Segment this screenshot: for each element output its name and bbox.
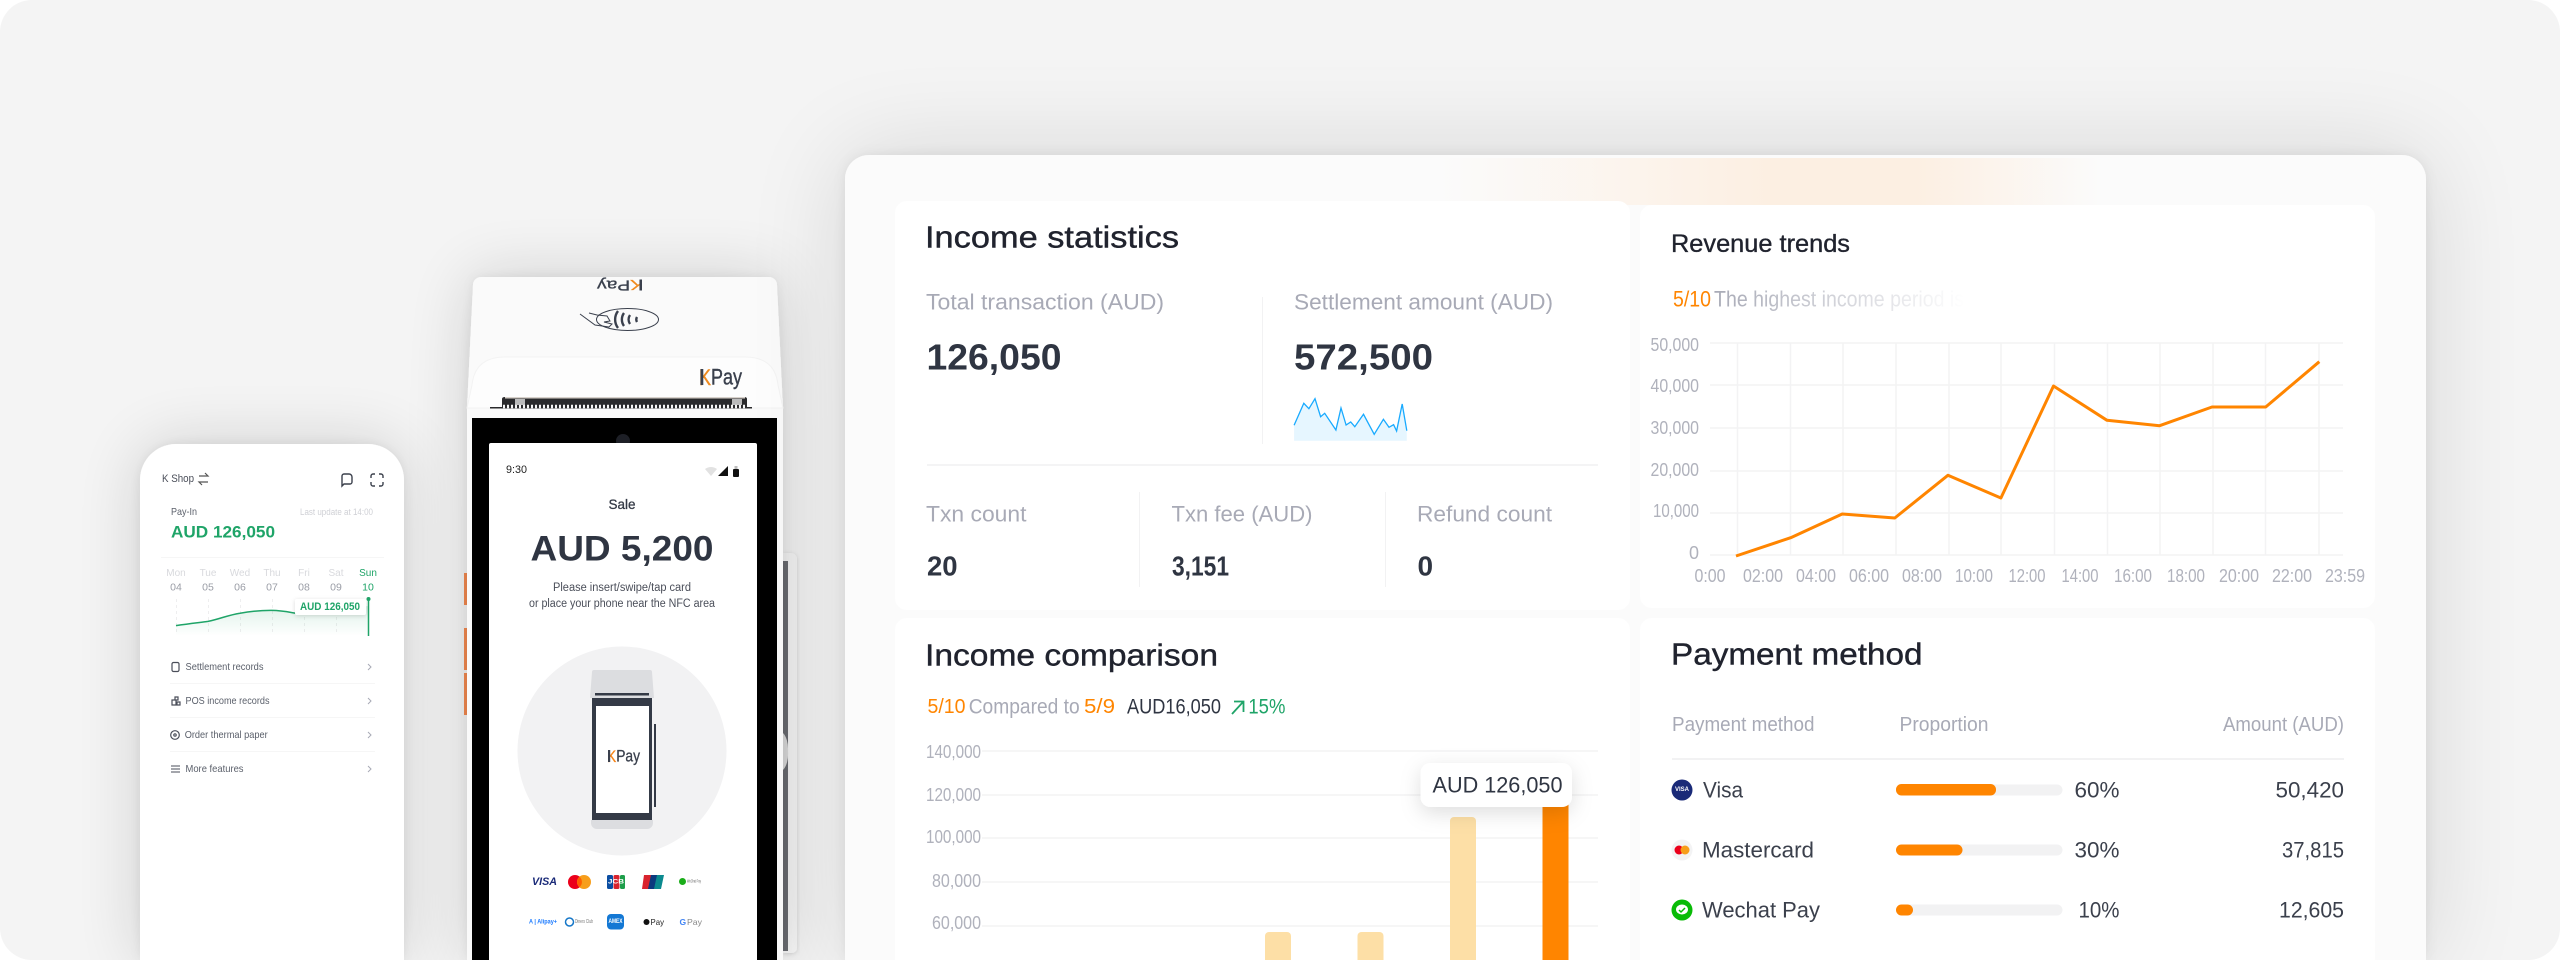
logo: Google Pay	[680, 917, 703, 927]
row: wechat pay: Wechat Pay	[1702, 898, 1820, 922]
row: wechat pay	[1672, 898, 2344, 922]
phone menu: Order thermal paper	[185, 729, 268, 741]
dashboard card	[845, 155, 2426, 960]
x axis: 12:00	[2008, 566, 2046, 586]
bar chart	[926, 742, 1598, 960]
y axis: 10,000	[1653, 501, 1699, 521]
x axis	[1694, 566, 2365, 586]
top glow	[1440, 158, 2100, 205]
weekly labels: Fri	[298, 568, 310, 579]
comparison line: 15%	[1248, 696, 1285, 718]
subtitle: 5/10	[1673, 286, 1711, 312]
weekly labels: Sun	[359, 568, 377, 579]
heading: Income comparison	[925, 638, 1218, 672]
tooltip	[1420, 763, 1572, 807]
icon: visa: VISA	[1675, 787, 1690, 793]
comparison line: 5/9	[1084, 696, 1115, 718]
sale amount: Please insert/swipe/tap card	[553, 582, 691, 594]
sale amount: AUD 5,200	[530, 530, 714, 568]
table header	[1672, 714, 2344, 736]
upside-down logo: KPay	[596, 276, 643, 294]
phone app mockup	[140, 444, 404, 960]
x axis: 04:00	[1796, 566, 1836, 586]
comparison line: 5/10	[928, 696, 966, 718]
stat: txn count: 20	[927, 550, 958, 582]
weekly labels: Thu	[263, 568, 281, 579]
phone menu: POS income records	[186, 695, 270, 707]
icon: contactless tap	[580, 308, 658, 330]
stat: txn count	[926, 502, 1026, 582]
x axis: 08:00	[1902, 566, 1942, 586]
comparison line	[928, 696, 1285, 718]
row: mastercard: Mastercard	[1702, 838, 1814, 862]
card surface	[845, 155, 2426, 960]
logo: WeChat Pay: WeChat Pay	[687, 878, 701, 884]
stat: settlement amount: Settlement amount (AUD)	[1294, 290, 1553, 314]
phone header	[162, 473, 383, 486]
phone header: K Shop	[162, 473, 194, 485]
y axis: 120,000	[926, 785, 981, 805]
weekly labels: 06	[234, 582, 246, 594]
stat: total transaction: Total transaction (AUD)	[926, 290, 1164, 314]
weekly labels: 05	[202, 582, 214, 594]
revenue line	[1736, 362, 2319, 556]
row: mastercard: 30%	[2074, 838, 2120, 862]
printer slot	[490, 397, 752, 408]
y axis: 100,000	[926, 827, 981, 847]
y axis: 40,000	[1650, 376, 1699, 396]
logo: Alipay: A | Alipay+	[529, 918, 557, 926]
logo: Visa: VISA	[532, 876, 557, 888]
logo: Diners	[566, 918, 593, 926]
icon: scan	[371, 474, 383, 486]
icon: visa	[1672, 780, 1692, 800]
icon: settlement	[172, 662, 179, 672]
camera	[616, 434, 630, 448]
stat: settlement amount	[1294, 290, 1553, 441]
phone menu	[170, 661, 375, 775]
pay-in summary: Pay-In	[171, 506, 197, 518]
bars	[1265, 800, 1568, 960]
weekly labels: Wed	[230, 568, 250, 579]
sale amount: or place your phone near the NFC area	[529, 598, 716, 610]
weekly labels: Mon	[166, 568, 186, 579]
phone line chart	[176, 597, 370, 636]
x axis: 10:00	[1955, 566, 1993, 586]
phone chart tooltip: AUD 126,050	[300, 601, 360, 613]
x axis: 14:00	[2062, 566, 2098, 586]
weekly labels: 10	[362, 582, 374, 594]
lid logo: KPay	[699, 364, 742, 390]
icon: mastercard	[1672, 840, 1692, 860]
logo: JCB	[607, 875, 625, 889]
row: wechat pay: 10%	[2078, 898, 2120, 922]
logo: Mastercard	[568, 875, 591, 889]
weekly labels: 04	[170, 582, 182, 594]
panel: income comparison	[895, 618, 1630, 960]
x axis: 18:00	[2167, 566, 2205, 586]
sparkline	[1294, 399, 1407, 441]
y axis: 30,000	[1650, 418, 1699, 438]
heading: Revenue trends	[1671, 230, 1850, 258]
panel: income statistics	[895, 201, 1630, 610]
y axis: 60,000	[932, 913, 981, 933]
logo: Apple Pay: Pay	[650, 917, 665, 927]
logo: AmEx	[607, 914, 624, 930]
terminal screen bezel	[472, 418, 777, 960]
phone chart tooltip	[295, 599, 366, 615]
sale amount: Sale	[608, 496, 636, 512]
phone menu: More features	[186, 763, 244, 775]
weekly labels: 09	[330, 582, 342, 594]
logo: AmEx: AMEX	[608, 919, 622, 925]
sale amount	[529, 496, 716, 610]
logo: Apple Pay	[644, 917, 665, 927]
x axis: 02:00	[1743, 566, 1783, 586]
logo: Google Pay: G	[680, 917, 686, 927]
x axis: 0:00	[1694, 566, 1726, 586]
heading: Income statistics	[925, 220, 1179, 254]
stat: txn fee: Txn fee (AUD)	[1172, 502, 1312, 526]
mini terminal illustration: KPay	[607, 746, 640, 766]
y axis	[926, 742, 981, 933]
tooltip: AUD 126,050	[1432, 772, 1562, 798]
x axis: 22:00	[2272, 566, 2312, 586]
subtitle: The highest income period is	[1714, 286, 1964, 312]
phone body	[140, 444, 404, 960]
payment logos	[529, 875, 703, 930]
y axis	[1650, 335, 1699, 563]
terminal side reader	[783, 553, 797, 953]
line chart	[1650, 335, 2365, 586]
row: visa: 50,420	[2276, 778, 2344, 802]
table header: Payment method	[1672, 714, 1814, 736]
logo: WeChat Pay	[679, 878, 701, 885]
stat: txn fee	[1172, 502, 1312, 582]
pay-in summary: Last update at 14:00	[300, 507, 373, 517]
stat: refund count	[1417, 502, 1552, 582]
stat: txn count: Txn count	[926, 502, 1026, 526]
weekly labels: Sat	[328, 568, 344, 579]
comparison line: Compared to	[969, 696, 1080, 718]
y axis: 80,000	[932, 871, 981, 891]
printer lid	[467, 357, 783, 408]
status bar: 9:30	[506, 464, 527, 476]
stat: total transaction	[926, 290, 1164, 378]
heading: Payment method	[1671, 636, 1922, 672]
icon: POS income	[172, 697, 180, 705]
mini terminal illustration	[518, 646, 726, 856]
logo: Google Pay: Pay	[687, 917, 703, 927]
panel surface	[895, 201, 1630, 610]
x axis: 06:00	[1849, 566, 1889, 586]
x axis: 16:00	[2114, 566, 2152, 586]
weekly labels	[166, 568, 377, 594]
panel: revenue trends	[1640, 205, 2375, 608]
weekly labels: 08	[298, 582, 310, 594]
icon: more	[171, 766, 180, 772]
row: visa	[1672, 778, 2344, 802]
row: mastercard: 37,815	[2282, 838, 2344, 862]
weekly labels: 07	[266, 582, 278, 594]
stat: settlement amount: 572,500	[1294, 336, 1433, 378]
x axis: 23:59	[2325, 566, 2365, 586]
panel surface	[895, 618, 1630, 960]
logo: UnionPay	[642, 875, 664, 889]
panel surface	[1640, 618, 2375, 960]
weekly labels: Tue	[200, 568, 217, 579]
stat: total transaction: 126,050	[926, 336, 1062, 378]
icon: wechat	[1672, 900, 1692, 920]
icon: thermal paper	[171, 731, 179, 739]
panel surface	[1640, 205, 2375, 608]
stat: txn fee: 3,151	[1172, 550, 1229, 582]
row: visa: Visa	[1703, 778, 1744, 802]
table header: Amount (AUD)	[2223, 714, 2344, 736]
terminal display	[489, 443, 757, 960]
logo: Diners: Diners Club	[575, 919, 593, 925]
pay-in summary: AUD 126,050	[171, 522, 275, 542]
pay-in summary	[171, 506, 373, 542]
y axis: 20,000	[1650, 460, 1699, 480]
y axis: 0	[1689, 543, 1699, 563]
phone menu: Settlement records	[186, 661, 264, 673]
row: wechat pay: 12,605	[2279, 898, 2344, 922]
terminal printer head	[467, 277, 783, 960]
row: visa: 60%	[2074, 778, 2120, 802]
stat: refund count: Refund count	[1417, 502, 1552, 526]
icon: up arrow	[1232, 702, 1244, 714]
panel: payment method	[1640, 618, 2375, 960]
logo: JCB: JCB	[608, 880, 625, 886]
x axis: 20:00	[2219, 566, 2259, 586]
y axis: 140,000	[926, 742, 981, 762]
status bar	[506, 464, 739, 477]
row: mastercard	[1672, 838, 2344, 862]
icon: message	[342, 474, 352, 486]
terminal buttons	[464, 573, 467, 715]
POS terminal	[464, 276, 797, 960]
table header: Proportion	[1900, 714, 1988, 736]
stat: refund count: 0	[1418, 550, 1433, 582]
comparison line: AUD16,050	[1127, 696, 1221, 718]
y axis: 50,000	[1650, 335, 1699, 355]
